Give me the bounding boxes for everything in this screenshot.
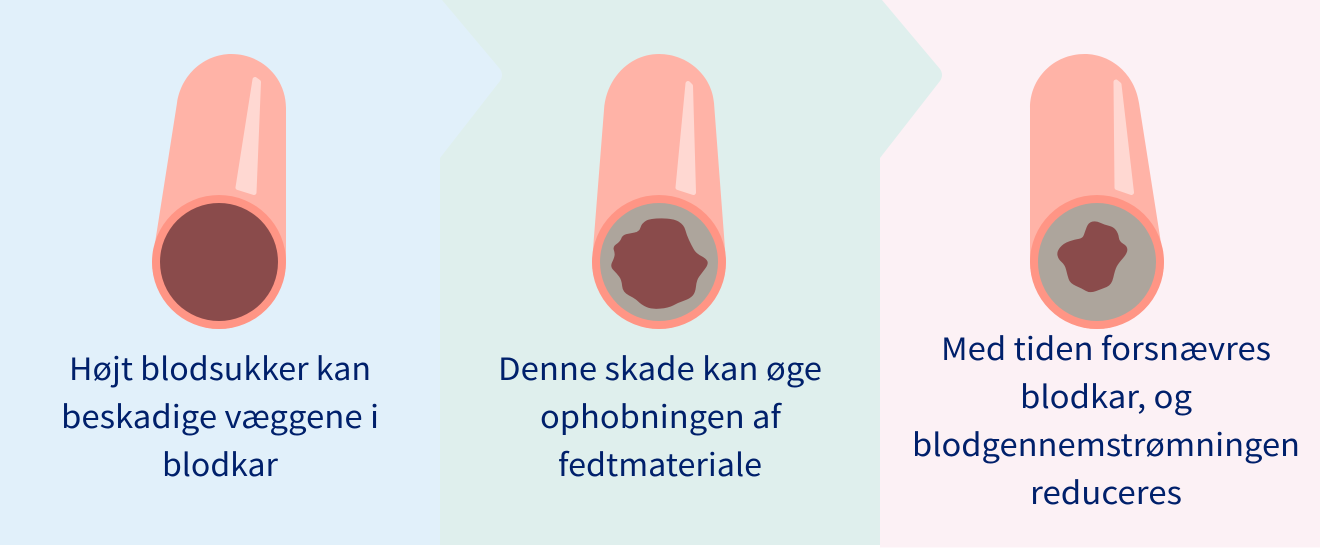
text block: step 3 caption <box>912 324 1300 513</box>
text block: step 3 caption: reduceres <box>1030 468 1182 513</box>
text block: step 1 caption: beskadige væggene i <box>61 392 379 437</box>
text block: step 2 caption <box>498 344 822 485</box>
text block: step 2 caption: Denne skade kan øge <box>498 344 822 389</box>
text block: step 1 caption: Højt blodsukker kan <box>69 344 371 389</box>
icon: blood vessel with fatty build-up <box>592 54 726 329</box>
text block: step 2 caption: fedtmateriale <box>558 440 762 485</box>
text block: step 3 caption: blodkar, og <box>1020 372 1193 417</box>
icon: narrowed blood vessel <box>1030 54 1164 329</box>
panel: step 2 background <box>440 0 942 545</box>
panel: step 1 background <box>0 0 502 545</box>
text block: step 3 caption: blodgennemstrømningen <box>912 420 1300 465</box>
text block: step 2 caption: ophobningen af <box>540 392 783 437</box>
icon: healthy blood vessel <box>152 54 286 329</box>
text block: step 3 caption: Med tiden forsnævres <box>941 324 1271 369</box>
text block: step 1 caption: blodkar <box>162 440 279 485</box>
text block: step 1 caption <box>61 344 379 485</box>
panel: step 3 background <box>880 0 1320 548</box>
